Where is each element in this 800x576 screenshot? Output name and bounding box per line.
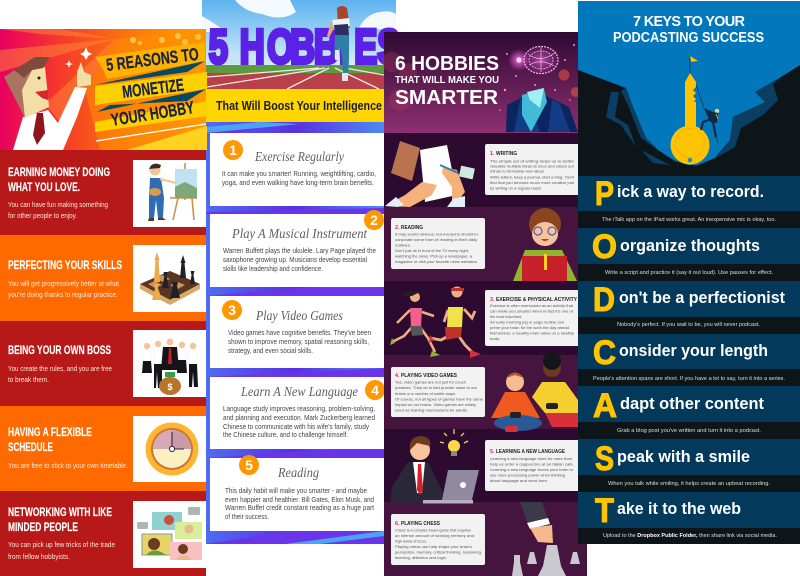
key 5: A: Grab a blog post you've written and turn it into a podcast.: [617, 428, 761, 434]
card: exercise: Remember, a healthy brain relies on a healthy: [490, 332, 574, 336]
row 1: earning money: WHAT YOU LOVE.: [8, 180, 80, 194]
key 5: A: dapt other content: [620, 394, 764, 413]
panel: 6 hobbies that will make you smarter: [382, 32, 587, 576]
card: exercise: EXERCISE & PHYSICAL ACTIVITY: [496, 297, 577, 303]
key 6: S: When you talk while smiling, it helps create an upbeat recording.: [608, 481, 770, 487]
card 5: reading: of their success.: [225, 512, 269, 521]
key 1: P: The iTalk app on the iPad works great. An inexpensive mic is okay, too.: [602, 217, 776, 223]
row 5: networking: NETWORKING WITH LIKE: [8, 505, 112, 519]
key 7: T: [578, 492, 800, 544]
card 3: play video games: Video games have cognitive benefits. They've been: [228, 328, 371, 337]
row 4: flexible schedule: [0, 406, 206, 491]
key 1: P: [578, 175, 800, 228]
row 3: being your own boss: to break them.: [8, 377, 49, 384]
card: writing: [485, 144, 585, 195]
hero heading: MONETIZE: [121, 75, 185, 102]
badge 4: 4: [371, 382, 379, 398]
card: reading: [391, 218, 485, 269]
card: new language: Learning a new language forces your brain to: [490, 468, 573, 472]
card: video games: brains in a number of subtle ways.: [395, 392, 456, 396]
badge 5: 5: [245, 457, 253, 473]
card: reading: watching the news. Pick up a newspaper, a: [395, 254, 473, 258]
key 3: D: D: [593, 281, 615, 319]
title: [613, 14, 764, 46]
badge 1: 1: [229, 142, 237, 158]
card: video games: 4.: [395, 373, 400, 379]
panel: 7 keys to your podcasting success: [578, 1, 800, 544]
key 4: C: [578, 334, 800, 386]
cartoon man pointing up: [4, 47, 92, 150]
card: new language: about language and word form.: [490, 479, 548, 483]
card: writing: The simple act of writing helps us to better: [490, 160, 575, 164]
key 1: P: P: [595, 175, 614, 213]
card 4: learn a new language: [210, 377, 385, 449]
key 2: O: [578, 228, 800, 281]
row 5: networking: MINDED PEOPLE: [8, 520, 78, 534]
card 5: reading: [210, 455, 384, 531]
key 5: A: A: [593, 387, 617, 425]
card: writing: Write letters, keep a journal, start a blog. You'll: [490, 176, 574, 180]
row 2: perfecting skills: you're doing thanks to regular practice.: [8, 292, 118, 299]
card 3: play video games: [210, 296, 384, 368]
row 4: flexible schedule: SCHEDULE: [8, 440, 53, 454]
card 1: exercise regularly: yoga, and even walking have long-term brain benefits.: [222, 178, 374, 187]
row 2: perfecting skills: [0, 235, 206, 321]
card 3: play video games: strategy, and even social skills.: [228, 346, 313, 355]
card 1: exercise regularly: [210, 133, 384, 206]
key 7: T: ake it to the web: [617, 499, 741, 518]
card: video games: Of course, not all types of games have the same: [395, 398, 483, 402]
card: video games: used as training mechanisms for adults.: [395, 408, 468, 412]
card: exercise: can make you smarter when in fact it's one of: [490, 310, 574, 314]
card: chess: Playing chess can help shape your brain's: [395, 545, 472, 549]
card: reading: READING: [401, 225, 423, 231]
yellow subtitle band: That Will Boost Your Intelligence: [216, 98, 382, 113]
card 3: play video games: Play Video Games: [255, 309, 343, 324]
row 3: being your own boss: You create the rules, and you are free: [8, 366, 112, 373]
golden key with flag: [670, 56, 710, 164]
card 5: reading: Warren Buffet credit constant reading as a huge part: [225, 503, 374, 512]
hero heading: YOUR HOBBY: [109, 97, 196, 130]
card: writing: by writing on a regular basis.: [490, 186, 542, 190]
card: chess: [391, 514, 485, 565]
card: reading: Don't just sit in front of the TV every night,: [395, 249, 469, 253]
card: exercise: An early morning jog or yoga routine can: [490, 320, 564, 324]
card 4: learn a new language: Language study improves reasoning, problem-solving,: [223, 404, 375, 413]
key 4: C: onsider your length: [619, 341, 768, 360]
card: chess: PLAYING CHESS: [401, 521, 440, 527]
card: writing: minds to formulate new ideas.: [490, 170, 545, 174]
card: reading: magazine or visit your favorite news websites.: [395, 260, 478, 264]
runner figure: [327, 6, 350, 81]
key 7: T: Upload to the Dropbox Public Folder, then share link via social media.: [603, 533, 777, 539]
card 4: learn a new language: Learn A New Language: [240, 385, 358, 400]
card 1: exercise regularly: Exercise Regularly: [254, 150, 345, 165]
row 4: flexible schedule: You are free to stick to your own timetable.: [8, 463, 128, 470]
card 5: reading: Reading: [277, 466, 319, 481]
glowing brain and suit: [506, 44, 578, 132]
heading: THAT WILL MAKE YOU: [395, 75, 499, 86]
icon: video call: [133, 501, 206, 568]
card: reading: It may sound obvious, but everyone should in-: [395, 232, 480, 236]
hero heading: [105, 44, 200, 130]
row 2: perfecting skills: You will get progressively better at what: [8, 281, 119, 288]
card: chess: 6.: [395, 521, 400, 527]
icon: business team with money bag: $: [167, 382, 173, 392]
key 7: T: T: [595, 492, 614, 530]
card 2: play a musical instrument: Play A Musical Instrument: [231, 227, 368, 242]
title: PODCASTING SUCCESS: [613, 30, 764, 46]
key 3: D: on't be a perfectionist: [619, 288, 785, 307]
yellow subtitle band: [206, 89, 384, 122]
badge 5: [239, 455, 259, 475]
key 6: S: S: [595, 440, 614, 478]
heading: SMARTER: [395, 86, 498, 109]
card 5: reading: This daily habit will make you smarter - and maybe: [225, 486, 367, 495]
key 6: S: [578, 439, 800, 492]
card 4: learn a new language: Chinese to communicate with his wife's family, study: [223, 422, 369, 431]
card: video games: [391, 367, 485, 417]
row 5: networking: from fellow hobbyists.: [8, 554, 70, 561]
hero banner: [0, 29, 207, 150]
key 2: O: O: [592, 228, 617, 266]
card: writing: 1.: [490, 151, 495, 157]
purple patterned background: [206, 122, 384, 544]
card 2: play a musical instrument: skills like leadership and confidence.: [223, 264, 323, 273]
card: exercise: [485, 290, 585, 346]
card 3: play video games: shown to improve memory, spatial reasoning skills,: [228, 337, 369, 346]
section bands: [384, 133, 587, 576]
row 4: flexible schedule: HAVING A FLEXIBLE: [8, 425, 92, 439]
illustration: reader with book: [513, 208, 577, 281]
card: new language: 5.: [490, 449, 495, 455]
title: 7 KEYS TO YOUR: [633, 14, 746, 30]
card: writing: visualize multiple ideas at once and clears our: [490, 164, 575, 168]
card: writing: WRITING: [496, 151, 517, 157]
hero background: [382, 32, 587, 133]
illustration: businessman with laptop: [390, 429, 479, 504]
row 1: earning money: [0, 150, 206, 235]
illustration: runners: [390, 286, 481, 358]
card: exercise: Exercise is often overlooked as an activity that: [490, 304, 574, 308]
card 4: learn a new language: and planning and execution. Mark Zuckerberg learned: [223, 413, 375, 422]
row 5: networking: You can pick up few tricks of the trade: [8, 542, 115, 549]
card: chess: perception, memory, critical thinking, reasoning,: [395, 550, 482, 554]
hero: running track scene: [202, 0, 396, 90]
hero title: 5 HOBBIES: [209, 19, 400, 73]
illustration: writing: [385, 141, 475, 207]
card: new language: [485, 440, 585, 491]
card: video games: PLAYING VIDEO GAMES: [401, 373, 457, 379]
icon: business team with money bag: [133, 330, 206, 397]
row 1: earning money: You can have fun making something: [8, 202, 108, 209]
panel: 5 hobbies that will boost your intelligence: [202, 0, 400, 544]
card: exercise: body.: [490, 337, 500, 341]
icon: chess set: [133, 245, 206, 312]
row 3: being your own boss: BEING YOUR OWN BOSS: [8, 343, 111, 357]
badge 2: 2: [370, 212, 378, 228]
hero sky: [578, 1, 800, 176]
panel: 5 reasons to monetize your hobby: [0, 29, 207, 576]
card 2: play a musical instrument: [210, 210, 384, 287]
badge 1: [223, 140, 243, 160]
card 2: play a musical instrument: saxophone growing up. Musicians develop essential: [223, 255, 367, 264]
badge 4: [365, 380, 385, 400]
card: video games: potatoes. They do in fact provide value to our: [395, 386, 478, 390]
key 2: O: organize thoughts: [620, 236, 760, 255]
badge 3: 3: [228, 302, 236, 318]
row 1: earning money: for other people to enjoy.: [8, 213, 77, 220]
card 1: exercise regularly: It can make you smarter! Running, weightlifting, cardio,: [222, 169, 376, 178]
card: chess: learning, attention and logic.: [395, 556, 447, 560]
card 5: reading: even happier and healthier. Bill Gates, Elon Musk, and: [225, 495, 374, 504]
heading: [395, 53, 499, 109]
heading: 6 HOBBIES: [395, 53, 499, 75]
card: chess: high levels of focus.: [395, 540, 427, 544]
icon: clock: [133, 416, 206, 482]
illustration: hand moving chess piece: [512, 502, 580, 576]
card: new language: LEARNING A NEW LANGUAGE: [496, 449, 565, 455]
badge 2: [364, 210, 384, 230]
key 2: O: Write a script and practice it (say it out loud). Use pauses for effect.: [605, 270, 773, 276]
card: video games: Yes, video games are not just for couch: [395, 380, 466, 384]
card: reading: 2.: [395, 225, 400, 231]
card: new language: use more processing power when thinking: [490, 474, 565, 478]
key 4: C: People's attention spans are short. If you have a lot to say, turn it into a series.: [593, 376, 785, 382]
icon: painter at easel: [133, 160, 206, 227]
card: exercise: the most important.: [490, 315, 522, 319]
card: writing: find that you become much more creative just: [490, 181, 575, 185]
badge 3: [222, 300, 242, 320]
key 1: P: ick a way to record.: [617, 182, 764, 201]
canyon: [578, 65, 800, 176]
key 4: C: C: [593, 334, 616, 372]
card: chess: an intense amount of working memory and: [395, 534, 474, 538]
card: reading: corporate some from of reading in their daily: [395, 238, 477, 242]
card: chess: Chess is a complex board game that requires: [395, 528, 471, 532]
row 1: earning money: EARNING MONEY DOING: [8, 165, 110, 179]
card: exercise: 3.: [490, 297, 495, 303]
card: video games: impact on our brains. Video games are widely: [395, 403, 476, 407]
illustration: kids playing games: [491, 352, 578, 432]
key 6: S: peak with a smile: [617, 447, 750, 466]
climber on rope: [696, 85, 719, 143]
card 2: play a musical instrument: Warren Buffett plays the ukulele. Lary Page played the: [223, 246, 376, 255]
card: new language: Learning a new language does for more than: [490, 457, 572, 461]
card: new language: help us order a cappuccino at an Italian cafe.: [490, 462, 574, 466]
card: reading: routines.: [395, 244, 411, 248]
card 4: learn a new language: the Chinese culture, and to challenge himself.: [223, 430, 348, 439]
row 2: perfecting skills: PERFECTING YOUR SKILLS: [8, 258, 122, 272]
row 5: networking: [0, 491, 206, 576]
row 3: being your own boss: [0, 321, 206, 406]
key 3: D: [578, 281, 800, 334]
hero heading: 5 REASONS TO: [105, 44, 200, 75]
card: exercise: prime your brain for the work the day ahead.: [490, 326, 570, 330]
key 5: A: [578, 386, 800, 439]
key 3: D: Nobody's perfect. If you wait to be, you will never podcast.: [617, 322, 760, 328]
